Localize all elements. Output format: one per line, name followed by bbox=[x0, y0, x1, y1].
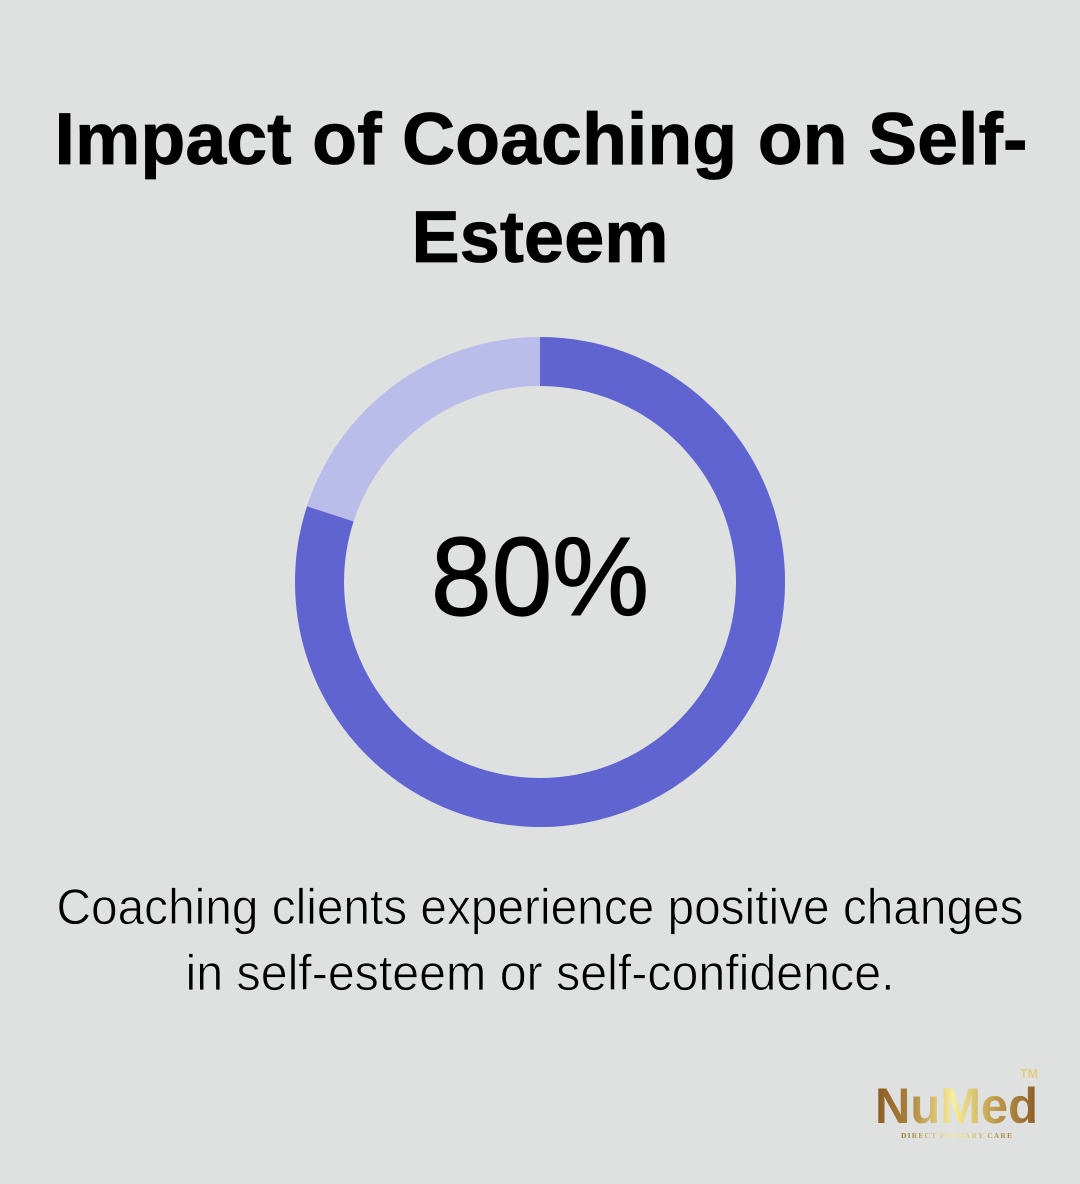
remaining 20% segment bbox=[320, 362, 760, 802]
title bbox=[54, 99, 1028, 278]
description: in self-esteem or self-confidence. bbox=[186, 945, 894, 1001]
description bbox=[56, 879, 1024, 1001]
title: Impact of Coaching on Self- bbox=[54, 99, 1028, 180]
logo: NuMed: TM bbox=[1020, 1066, 1038, 1081]
logo: NuMed: DIRECT PRIMARY CARE bbox=[901, 1131, 1012, 1140]
donut chart: 80% bbox=[320, 362, 761, 802]
title: Esteem bbox=[412, 197, 668, 278]
highlighted 80% segment bbox=[320, 362, 761, 802]
logo: NuMed: NuMed bbox=[875, 1078, 1038, 1134]
center value: 80% bbox=[431, 515, 649, 639]
description: Coaching clients experience positive changes bbox=[56, 879, 1024, 935]
